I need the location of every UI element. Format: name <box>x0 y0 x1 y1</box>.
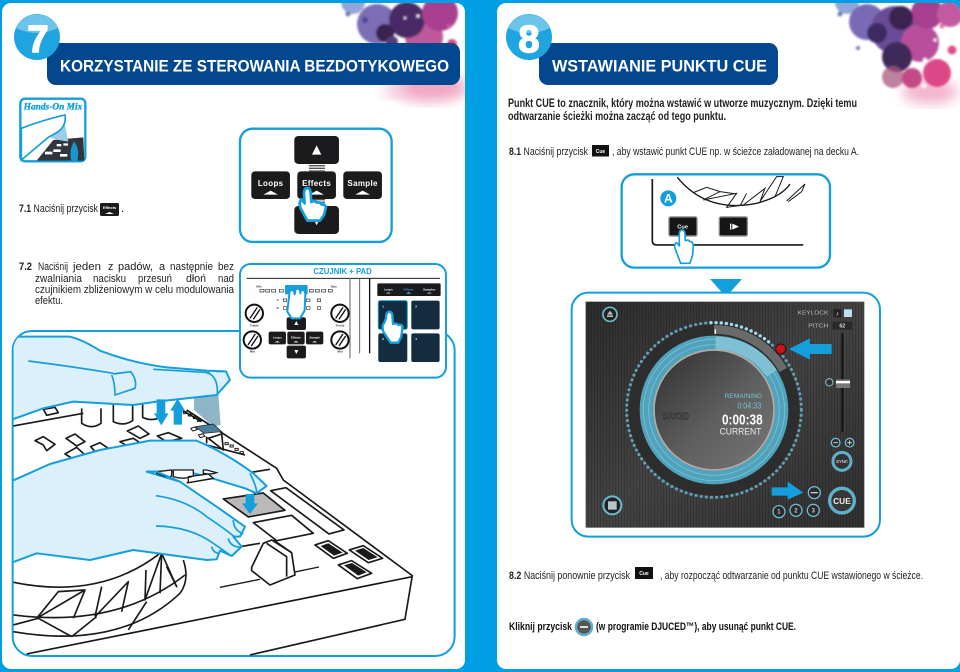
text: step 7.2: następnie <box>170 261 213 273</box>
decorative splash left <box>341 0 468 102</box>
pointing hand <box>675 230 693 263</box>
panel: software screen: REMAINING <box>725 394 762 400</box>
illustration: hands on controller <box>13 331 455 656</box>
intro text <box>508 98 857 123</box>
panel: sensor and pad: Treble <box>250 323 259 327</box>
text: step 7.2: zwalniania <box>35 273 83 285</box>
panel: sensor and pad: CZUJNIK + PAD <box>313 267 372 276</box>
panel: sensor and pad: Samples <box>423 287 436 291</box>
text: step 7.2 <box>19 261 235 307</box>
platter <box>624 320 804 500</box>
panel: effects buttons: Sample <box>347 179 378 188</box>
step badge 7 <box>14 14 60 61</box>
keylock and pitch <box>798 309 852 330</box>
pitch buttons <box>831 438 854 447</box>
panel: sensor and pad: Mid <box>250 349 255 353</box>
arrows: sensor movement and pad press <box>154 399 258 514</box>
panel: software screen <box>572 293 880 537</box>
lower hand <box>13 441 267 562</box>
icon: hands-on mix <box>20 99 85 161</box>
panel: software screen: 0:00:38 <box>722 412 763 428</box>
panel: deck A cue button <box>622 174 830 268</box>
panel: sensor and pad: 2 <box>415 304 417 308</box>
text: step 7.2: padów, <box>118 261 153 273</box>
deck A badge: A <box>664 192 673 206</box>
text: step 7.2: a <box>159 261 166 273</box>
panel: sensor and pad: A <box>277 298 280 302</box>
panel: step 8 <box>497 0 960 669</box>
text: step 8.1: 8.1 Naciśnij przycisk <box>509 146 588 158</box>
cue button <box>830 488 854 513</box>
cue point buttons <box>773 487 820 518</box>
panel: sensor and pad: Sample <box>309 335 320 339</box>
note: delete cue point: (w programie DJUCED™), aby usunąć punkt CUE. <box>596 621 796 633</box>
panel: software screen: 0:04:33 <box>737 400 762 410</box>
arrow down <box>710 279 742 297</box>
panel: software screen: 3 <box>812 508 816 514</box>
text: step 7.2: Naciśnij <box>38 261 68 273</box>
upper hand <box>13 337 230 419</box>
text: step 7.2: jeden <box>72 261 101 273</box>
panel: sensor and pad: Min <box>256 284 262 288</box>
step badge 8: 8 <box>518 19 540 61</box>
keylock and pitch: 62 <box>839 324 845 330</box>
intro text: odtwarzanie ścieżki można zacząć od tego punktu. <box>508 111 726 123</box>
text: step 8.1: Cue <box>596 149 605 155</box>
eject and list buttons <box>603 307 617 321</box>
text: step 7.1: 7.1 Naciśnij przycisk <box>19 203 98 215</box>
panel: sensor and pad: Loops <box>273 335 282 339</box>
sensor hand <box>285 285 308 294</box>
note: delete cue point: Kliknij przycisk <box>509 621 573 633</box>
pad highlighted <box>223 493 285 517</box>
touch pads <box>377 283 441 296</box>
pad hand <box>383 312 403 343</box>
play button <box>719 217 747 236</box>
panel: software screen: 1 <box>777 510 781 516</box>
panel: effects buttons: Effects <box>302 179 331 188</box>
keylock and pitch: ♪ <box>836 311 839 317</box>
arrow: cue marker <box>789 338 832 360</box>
panel: sensor and pad: Treble <box>336 323 345 327</box>
panel: sensor and pad: 3 <box>382 337 384 341</box>
panel: software screen: 2 <box>794 508 798 514</box>
decorative splash right <box>835 0 960 104</box>
panel: sensor and pad: Mid <box>337 349 343 353</box>
text: step 7.2: dłoń <box>186 273 206 285</box>
text: step 7.2: nad <box>218 273 234 285</box>
pitch slider <box>826 333 850 432</box>
panel: effects buttons <box>240 129 392 242</box>
panel: sensor and pad: Loops <box>384 287 393 291</box>
text: step 8.2: 8.2 Naciśnij ponownie przycisk <box>509 570 630 582</box>
panel: software screen: CURRENT <box>720 427 762 437</box>
text: step 7.2: bez <box>218 261 234 273</box>
cue button: CUE <box>833 496 851 506</box>
panel: step 7 <box>2 0 468 669</box>
step badge 8 <box>506 14 552 61</box>
panel: effects buttons: Loops <box>258 179 284 188</box>
title bar 7: KORZYSTANIE ZE STEROWANIA BEZDOTYKOWEGO <box>60 56 449 76</box>
text: step 7.2: czujnikiem zbliżeniowym w celu modulowania <box>35 284 235 296</box>
panel: sensor and pad: Effects <box>291 335 301 339</box>
cue button <box>669 217 697 236</box>
text: step 7.2: 7.2 <box>19 261 32 273</box>
icon: hands-on mix: Hands-On Mix <box>23 102 83 112</box>
arrow: delete cue <box>772 482 803 500</box>
title bar 7 <box>47 43 460 85</box>
sync button <box>833 452 851 470</box>
step badge 7: 7 <box>27 19 49 61</box>
note: delete cue point <box>509 619 796 635</box>
panel: sensor and pad <box>240 264 446 378</box>
panel: sensor and pad: 4 <box>415 337 417 341</box>
text: step 8.1 <box>509 145 859 158</box>
deck A badge <box>660 190 676 206</box>
text: step 7.2: przesuń <box>138 273 172 285</box>
text: step 7.2: z <box>108 261 114 273</box>
title bar 8: WSTAWIANIE PUNKTU CUE <box>552 56 767 76</box>
text: step 7.2: nacisku <box>93 273 126 285</box>
panel: sensor and pad: Effects <box>404 287 414 291</box>
keylock and pitch: PITCH <box>808 324 828 330</box>
text: step 8.1: , aby wstawić punkt CUE np. w ścieżce załadowanej na decku A. <box>612 146 859 158</box>
sensor beam <box>194 393 221 427</box>
icon: pointing hand <box>300 188 326 221</box>
sync button: SYNC <box>836 459 848 464</box>
controller outline <box>13 402 412 655</box>
keylock and pitch: KEYLOCK <box>798 311 829 317</box>
intro text: Punkt CUE to znacznik, który można wstawić w utworze muzycznym. Dzięki temu <box>508 98 857 110</box>
panel: sensor and pad: 1 <box>382 304 384 308</box>
cue button: Cue <box>677 225 688 231</box>
title bar 8 <box>539 43 778 85</box>
text: step 7.2: efektu. <box>35 295 63 307</box>
text: step 7.1: Effects <box>103 205 117 210</box>
panel: sensor and pad: B <box>277 306 280 310</box>
text: step 8.2: Cue <box>639 571 649 577</box>
panel: sensor and pad: Max <box>331 284 337 288</box>
panel: software screen: DJUCED <box>663 411 689 422</box>
text: step 8.2 <box>509 567 923 582</box>
text: step 7.1: . <box>121 203 124 215</box>
cue marker <box>776 344 786 354</box>
